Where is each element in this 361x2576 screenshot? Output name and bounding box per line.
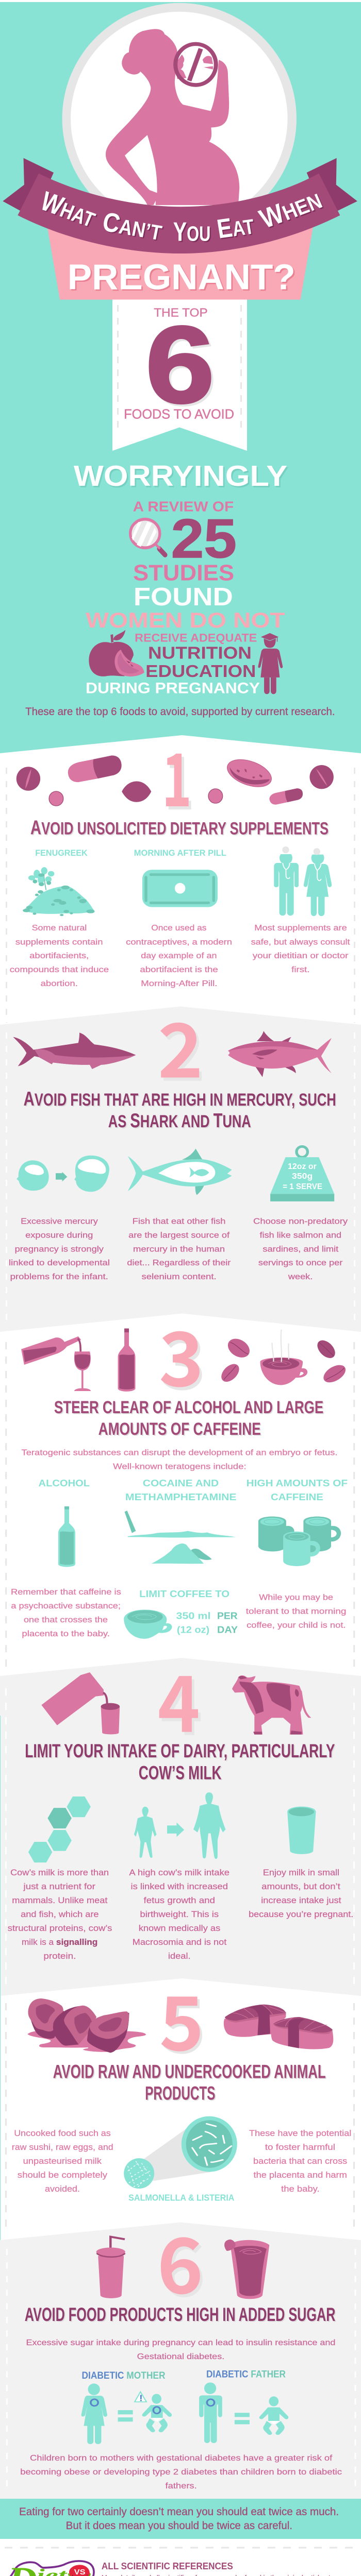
icon: diabetic mother equals child at risk: ! [139, 2394, 143, 2403]
number: 6: 6 [157, 2205, 203, 2316]
icon: shark [13, 1032, 136, 1069]
text: signalling protein: protein. [43, 1951, 76, 1961]
number: 4: 4 [158, 1642, 200, 1755]
text: signalling protein: Cow’s milk is more than [10, 1868, 109, 1877]
icon: diabetic mother equals child at risk [81, 2383, 172, 2444]
heading: avoid fish high in mercury [24, 1088, 336, 1132]
text: caffeine psychoactive: one that crosses the [24, 1615, 108, 1624]
text: macrosomia: is linked with increased [131, 1882, 228, 1891]
text: teratogenic substances intro [22, 1448, 337, 1471]
panel: section 4 dairy [0, 1642, 361, 1999]
icon: weight 12oz one serve: 12oz or [288, 1162, 317, 1171]
icon: teal bottle [58, 1506, 75, 1567]
text: uncooked food: unpasteurised milk [23, 2156, 102, 2166]
text: uncooked food: Uncooked food such as [14, 2128, 111, 2138]
text: consult doctor advice [251, 924, 350, 974]
text: studies: STUDIES [133, 560, 234, 586]
heading: limit dairy: COW’S MILK [139, 1762, 222, 1784]
icon: protein hexagons [28, 1797, 91, 1862]
icon: raw meat [27, 1998, 146, 2053]
text: morning after pill description: abortifacient is the [140, 965, 218, 974]
text: signalling protein: milk is a signalling [22, 1937, 97, 1947]
text: foods to avoid: FOODS TO AVOID [124, 407, 234, 422]
panel: section 5 raw animal products [0, 1963, 361, 2246]
title: what can't you eat when: WHEN [255, 184, 326, 234]
text: receive adequate: RECEIVE ADEQUATE [135, 632, 257, 645]
text: serving advice: Choose non-predatory [253, 1217, 348, 1226]
label: high amounts of caffeine [247, 1478, 348, 1503]
text: harmful bacteria: These have the potential [249, 2128, 351, 2138]
label: diabetic mother: DIABETIC MOTHER [81, 2370, 166, 2381]
text: fenugreek description [10, 924, 109, 988]
icon: body growth figures with arrow [134, 1792, 226, 1859]
icon: apple with slice [89, 630, 144, 676]
text: fenugreek description: abortion. [41, 979, 78, 988]
text: during pregnancy: DURING PREGNANCY [86, 680, 260, 697]
text: enjoy milk in small amounts: Enjoy milk in small [263, 1868, 339, 1877]
text: harmful bacteria: the baby. [281, 2184, 320, 2194]
icon: oval portrait frame [62, 3, 297, 234]
text: fenugreek description: supplements contain [15, 938, 103, 946]
label: cocaine and methamphetamine [125, 1478, 237, 1503]
text: children risk comparison [20, 2453, 342, 2490]
icon: pills and capsules left [17, 755, 151, 806]
icon: coffee cup and beans [218, 1330, 349, 1386]
text: insulin resistance: Gestational diabetes. [137, 2351, 224, 2361]
text: macrosomia [129, 1868, 229, 1961]
text: macrosomia: known medically as [139, 1923, 220, 1933]
icon: sugary drink glass [224, 2240, 269, 2299]
text: uncooked food: should be completely [18, 2170, 107, 2180]
text: signalling protein: structural proteins, cow’s [8, 1923, 112, 1933]
text: serving advice [253, 1217, 348, 1281]
icon: cow [232, 1675, 311, 1735]
panel: section 1 dietary supplements [0, 722, 361, 1030]
text: tolerance: While you may be [259, 1593, 333, 1602]
callout: limit coffee: 350 ml [176, 1611, 210, 1622]
text: serving advice: sardines, and limit [262, 1245, 339, 1253]
text: children risk comparison: fathers. [166, 2481, 197, 2490]
text: education: EDUCATION [145, 662, 256, 681]
icon: weight 12oz one serve: = 1 SERVE [283, 1182, 322, 1191]
text: caffeine psychoactive: a psychoactive substance; [11, 1602, 121, 1611]
icon: wine bottle pouring into glass [21, 1336, 91, 1391]
text: morning after pill description: Once used as [151, 924, 206, 933]
text: a review of: A REVIEW OF [133, 499, 234, 515]
text: found: FOUND [134, 583, 233, 612]
text: harmful bacteria: bacteria that can cross [253, 2156, 347, 2166]
icon: bacteria under magnification [124, 2116, 237, 2189]
icon: morning after pill blister [142, 870, 218, 907]
text: mercury exposure: exposure during [25, 1231, 93, 1240]
title: pregnant: PREGNANT? [68, 257, 296, 297]
text: mercury exposure: problems for the infant. [10, 1273, 108, 1281]
text: caffeine psychoactive [11, 1588, 121, 1638]
text: consult doctor advice: first. [291, 965, 309, 974]
text: predatory fish: Fish that eat other fish [133, 1217, 226, 1226]
icon: diet vs disease logo [5, 2561, 94, 2576]
icon: two doctors [274, 846, 332, 916]
text: nutrition: NUTRITION [148, 643, 252, 663]
text: enjoy milk in small amounts: amounts, but don’t [261, 1882, 340, 1891]
title: what can't you eat when: CAN’T [100, 207, 165, 246]
text: morning after pill description: Morning-After Pill. [141, 979, 217, 988]
text: enjoy milk in small amounts: increase intake just [261, 1895, 341, 1905]
callout: limit coffee: (12 oz) [177, 1624, 209, 1635]
stat: 25: 25 [171, 507, 237, 569]
icon: woman in graduation cap [258, 633, 283, 694]
icon: sushi [224, 2005, 333, 2049]
icon: weight 12oz one serve: 350g [292, 1172, 313, 1181]
text: teratogenic substances intro: Teratogenic substances can disrupt the development of an embryo or fetus. [22, 1448, 337, 1457]
text: mercury exposure: Excessive mercury [21, 1217, 99, 1226]
label: high amounts of caffeine: HIGH AMOUNTS OF [247, 1478, 348, 1489]
panel: pink title plate [47, 226, 313, 300]
text: consult doctor advice: your dietitian or doctor [253, 952, 349, 960]
text: uncooked food [12, 2128, 113, 2194]
label: cocaine and methamphetamine: METHAMPHETAMINE [125, 1492, 237, 1503]
icon: large fish containing small fish [128, 1148, 232, 1195]
text: tolerance: tolerant to that morning [246, 1607, 346, 1616]
text: fenugreek description: Some natural [32, 924, 87, 933]
panel: section 6 added sugar [0, 2205, 361, 2504]
text: insulin resistance [26, 2337, 335, 2361]
text: serving advice: servings to once per [258, 1259, 343, 1267]
text: harmful bacteria [249, 2128, 351, 2194]
icon: diabetic father equals healthy child [199, 2382, 288, 2443]
icon: brain growth heads with arrow [17, 1156, 109, 1192]
text: macrosomia: fetus growth and [144, 1895, 215, 1905]
panel: section 2 fish and mercury [0, 991, 361, 1340]
heading: avoid raw and undercooked [53, 2060, 326, 2104]
title: what can't you eat when [36, 184, 326, 247]
text: serving advice: week. [288, 1273, 313, 1281]
label: fenugreek: FENUGREEK [35, 848, 88, 858]
icon: weight 12oz one serve [270, 1146, 334, 1201]
number: 2: 2 [158, 991, 203, 1099]
icon: magnifying glass [130, 519, 165, 555]
text: predatory fish: mercury in the human [133, 1245, 225, 1253]
number: 5: 5 [159, 1963, 204, 2072]
text: macrosomia: birthweight. This is [140, 1909, 219, 1919]
panel: hero header [0, 2, 361, 770]
text: predatory fish: are the largest source of [128, 1231, 230, 1240]
heading: avoid fish high in mercury: AS SHARK AND TUNA [108, 1109, 251, 1132]
text: uncooked food: raw sushi, raw eggs, and [12, 2142, 113, 2152]
title: what can't you eat when: WHAT [36, 185, 101, 233]
heading: all scientific references: ALL SCIENTIFIC REFERENCES [102, 2561, 233, 2571]
text: caffeine psychoactive: Remember that caffeine is [11, 1588, 121, 1597]
text: signalling protein [8, 1868, 112, 1961]
callout: limit coffee: DAY [217, 1624, 238, 1635]
text: tolerance: coffee, your child is not. [247, 1621, 346, 1630]
label: salmonella and listeria: SALMONELLA & LISTERIA [128, 2193, 234, 2202]
heading: steer clear of alcohol and caffeine: AMOUNTS OF CAFFEINE [99, 1419, 261, 1439]
text: women do not: WOMEN DO NOT [86, 608, 285, 632]
text: macrosomia: Macrosomia and is not [133, 1937, 226, 1947]
text: signalling protein: just a nutrient for [23, 1882, 95, 1891]
icon: ribbon banner [3, 158, 357, 253]
text: morning after pill description: contraceptives, a modern [126, 938, 232, 946]
callout: limit coffee: PER [217, 1611, 238, 1622]
text: mercury exposure: pregnancy is strongly [15, 1245, 104, 1253]
number: 1: 1 [162, 722, 192, 827]
text: tolerance [246, 1593, 346, 1630]
text: fenugreek description: compounds that induce [10, 965, 109, 974]
icon: powder lines and straw [125, 1511, 236, 1564]
text: mercury exposure: linked to developmental [9, 1259, 110, 1267]
title: what can't you eat when: EAT [215, 209, 256, 244]
label: high amounts of caffeine: CAFFEINE [271, 1492, 323, 1503]
text: signalling protein: and fish, which are [21, 1909, 99, 1919]
text: teratogenic substances intro: Well-known teratogens include: [113, 1462, 247, 1471]
text: the top: THE TOP [154, 306, 208, 319]
text: signalling protein: mammals. Unlike meat [12, 1895, 108, 1905]
text: harmful bacteria: to foster harmful [265, 2142, 335, 2152]
text: fenugreek description: abortifacients, [29, 952, 89, 960]
icon: pills and capsules right [208, 754, 334, 805]
text: harmful bacteria: the placenta and harm [254, 2170, 347, 2180]
icon: three coffee mugs [258, 1517, 341, 1566]
text: consult doctor advice: safe, but always consult [251, 938, 350, 946]
text: predatory fish [127, 1217, 231, 1281]
panel: white flag top 6 foods [112, 300, 247, 451]
icon: fenugreek plant on mound [23, 867, 94, 916]
text: serving advice: fish like salmon and [260, 1231, 341, 1240]
heading: avoid raw and undercooked: PRODUCTS [145, 2082, 215, 2104]
text: enjoy milk in small amounts: because you’re pregnant. [249, 1909, 353, 1919]
icon: milk carton pouring into cup [41, 1672, 120, 1734]
text: uncooked food: avoided. [45, 2184, 80, 2194]
text: enjoy milk in small amounts [249, 1868, 353, 1919]
text: macrosomia: A high cow’s milk intake [129, 1868, 229, 1877]
icon: pregnant woman silhouette with no-food sign [106, 29, 239, 206]
text: predatory fish: diet... Regardless of their [127, 1259, 231, 1267]
callout: limit coffee [124, 1589, 238, 1639]
label: morning after pill: MORNING AFTER PILL [134, 848, 226, 858]
text: macrosomia: ideal. [168, 1951, 191, 1961]
text: mercury exposure [9, 1217, 110, 1281]
label: cocaine and methamphetamine: COCAINE AND [143, 1478, 219, 1489]
text: consult doctor advice: Most supplements are [254, 924, 347, 933]
icon: glass of milk [287, 1807, 316, 1854]
icon: soft drink cup with straw [96, 2236, 125, 2298]
heading: limit dairy [25, 1741, 335, 1784]
heading: worryingly: WORRYINGLY [74, 460, 287, 493]
title: what can't you eat when: YOU [173, 216, 210, 247]
text: morning after pill description: day example of an [141, 952, 217, 960]
text: caffeine psychoactive: placenta to the baby. [22, 1629, 110, 1638]
text: intro sentence: These are the top 6 foods to avoid, supported by current research. [25, 706, 335, 718]
number: 3: 3 [159, 1300, 204, 1408]
label: diabetic father: DIABETIC FATHER [206, 2369, 286, 2380]
callout: limit coffee: LIMIT COFFEE TO [139, 1589, 229, 1600]
icon: tuna [228, 1031, 332, 1077]
text: predatory fish: selenium content. [142, 1273, 217, 1281]
panel: section 3 alcohol and caffeine [0, 1300, 361, 1680]
label: alcohol: ALCOHOL [39, 1478, 90, 1489]
panel: closing message band [0, 2499, 361, 2539]
text: morning after pill description [126, 924, 232, 988]
heading: steer clear of alcohol and caffeine [54, 1398, 323, 1439]
icon: standing wine bottle [118, 1329, 136, 1392]
text: big number six: 6 [145, 303, 215, 426]
panel: footer [5, 2548, 358, 2576]
